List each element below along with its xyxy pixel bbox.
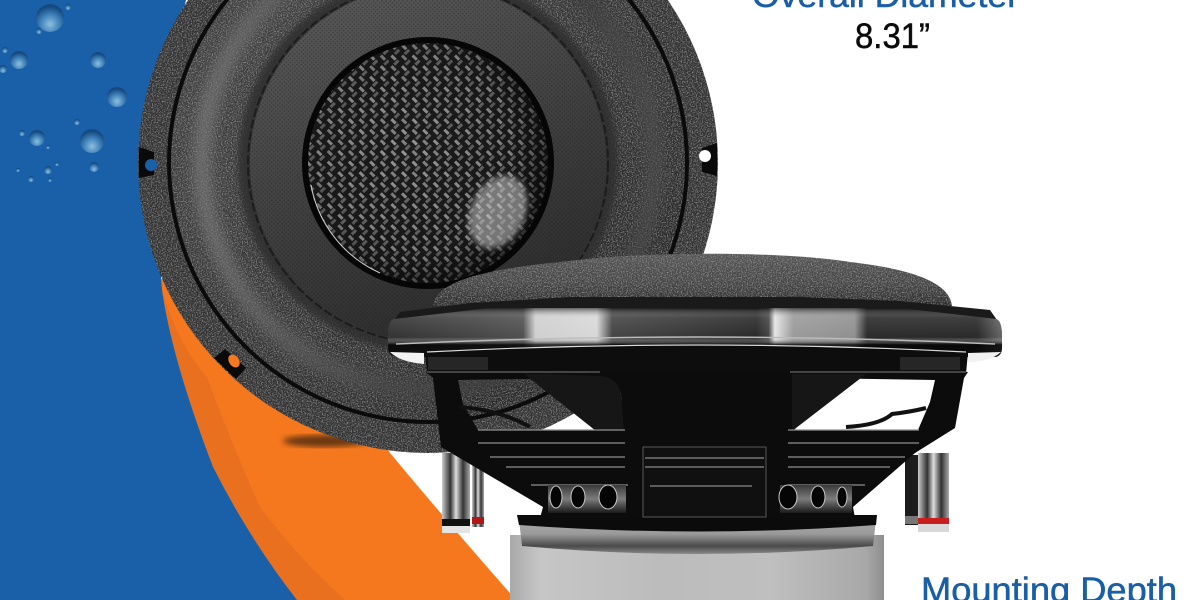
- right window inner cone: [792, 371, 870, 432]
- basket frame: [426, 372, 968, 518]
- inner surround: [238, 0, 618, 353]
- foam gasket rim: [394, 297, 997, 320]
- lower-left mounting notch: [214, 349, 246, 379]
- chrome flange: [388, 308, 1002, 364]
- textured cone ring: [250, 0, 606, 341]
- right mounting notch: [699, 143, 717, 176]
- dust cap rim highlight: [311, 185, 380, 273]
- magnet cylinder: [510, 535, 884, 600]
- value: 8.31 inches: 8.31”: [855, 17, 930, 56]
- background: blue panel: [0, 0, 297, 600]
- lower basket ring: [425, 344, 968, 374]
- fins: [478, 430, 919, 485]
- background: darker orange band: [150, 280, 345, 600]
- rubber surround: [171, 0, 685, 420]
- center spoke panel: [643, 447, 766, 517]
- stitched seam: [248, 0, 608, 343]
- left lead wire: [460, 407, 530, 427]
- left terminals: [442, 453, 484, 533]
- speaker shadow: [283, 435, 367, 447]
- right terminals: [905, 453, 949, 532]
- surround highlight ridge: [202, 0, 654, 389]
- dust cap reflection: [457, 166, 539, 258]
- foam gasket dome: [433, 254, 952, 306]
- left window inner cone: [523, 373, 624, 431]
- flange: [138, 0, 718, 453]
- carbon fibre dust cap: [308, 43, 548, 283]
- flange groove: [167, 0, 689, 424]
- vent band right: [780, 485, 852, 513]
- background: orange swoosh: [100, 270, 516, 600]
- left mounting notch: [139, 147, 157, 178]
- right lead wire: [846, 408, 926, 427]
- cone mesh: [250, 0, 606, 341]
- water droplets: [0, 4, 127, 182]
- side view of subwoofer: [388, 254, 1002, 600]
- magnet ring: [519, 514, 876, 554]
- dust cap rim: [302, 37, 554, 289]
- front view of subwoofer: [138, 0, 718, 453]
- vent holes: [550, 485, 847, 509]
- back plate: [517, 515, 877, 532]
- vent band left: [548, 485, 626, 513]
- dust cap shading: [308, 43, 548, 283]
